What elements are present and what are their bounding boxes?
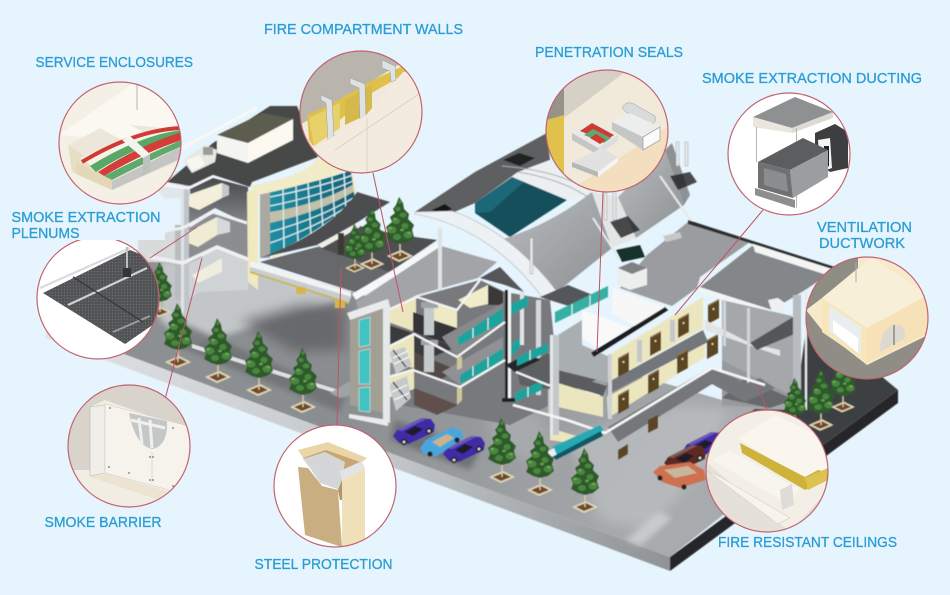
label: smoke extraction plenums: SMOKE EXTRACTION bbox=[12, 209, 160, 226]
label: ventilation ductwork: DUCTWORK bbox=[819, 235, 905, 252]
small roof over stairwell bbox=[480, 267, 524, 292]
right wing block wall bbox=[558, 308, 667, 383]
label: fire compartment walls: FIRE COMPARTMENT WALLS bbox=[264, 21, 463, 38]
cream service boxes bbox=[188, 183, 230, 283]
label: service enclosures: SERVICE ENCLOSURES bbox=[36, 54, 193, 71]
duct riser and white duct runs bbox=[150, 175, 250, 313]
label: penetration seals: PENETRATION SEALS bbox=[535, 44, 683, 61]
far duct section bbox=[815, 124, 848, 172]
rooftop plant box bbox=[217, 113, 293, 163]
lower grey floor bbox=[517, 353, 600, 392]
parked cars bbox=[393, 418, 725, 490]
rectangular duct and pipe bbox=[612, 103, 660, 150]
callout: service enclosures bbox=[59, 82, 182, 204]
cream and dark tier walls bbox=[388, 285, 503, 415]
label: fire resistant ceilings: FIRE RESISTANT CEILINGS bbox=[718, 534, 897, 551]
doors bbox=[618, 299, 719, 414]
callout: fire compartment walls bbox=[300, 51, 422, 173]
trees along the road bbox=[164, 303, 856, 513]
curved glazed facade bbox=[247, 156, 356, 290]
teal glazed balustrades bbox=[458, 286, 608, 402]
stair tower bbox=[347, 299, 390, 426]
callout: smoke barrier bbox=[68, 385, 192, 507]
rooftop HVAC units bbox=[183, 145, 217, 173]
left building roof bbox=[167, 106, 318, 187]
roof ventilation risers bbox=[438, 142, 697, 294]
leader lines bbox=[150, 173, 767, 425]
tower windows bbox=[359, 317, 370, 412]
callout: fire resistant ceilings bbox=[706, 410, 828, 532]
columns bbox=[421, 290, 559, 415]
white roof arch bbox=[415, 211, 558, 297]
label: smoke extraction ducting: SMOKE EXTRACTION DUCTING bbox=[702, 70, 922, 87]
label: smoke barrier: SMOKE BARRIER bbox=[44, 514, 162, 531]
canopy roof and walkway bbox=[250, 192, 443, 308]
cable tray seal bbox=[572, 120, 618, 155]
right wing walls bbox=[550, 297, 719, 445]
central vaulted roofs bbox=[356, 133, 697, 322]
right wing open frame bbox=[705, 290, 807, 410]
callout: smoke extraction ducting bbox=[728, 93, 850, 215]
left wing structure bbox=[138, 175, 250, 313]
right wing roof bbox=[612, 220, 835, 327]
callout: penetration seals bbox=[546, 70, 668, 192]
callout: steel protection bbox=[274, 425, 396, 549]
courtyard trees bbox=[344, 197, 414, 272]
label: steel protection: STEEL PROTECTION bbox=[254, 556, 392, 573]
building cutaway illustration bbox=[46, 106, 898, 571]
stair flights bbox=[389, 347, 412, 411]
lower tray bbox=[572, 148, 618, 177]
callout: ventilation ductwork bbox=[806, 257, 928, 379]
long ventilation duct run bbox=[513, 368, 775, 461]
label: ventilation ductwork: VENTILATION bbox=[817, 219, 912, 236]
label: smoke extraction plenums: PLENUMS bbox=[12, 225, 80, 242]
ground slab bbox=[46, 250, 898, 571]
central atrium floors bbox=[388, 267, 608, 425]
callout: smoke extraction plenums bbox=[37, 237, 160, 359]
label backing: smoke extraction plenums bbox=[8, 209, 165, 240]
tree behind left wing bbox=[148, 262, 172, 317]
